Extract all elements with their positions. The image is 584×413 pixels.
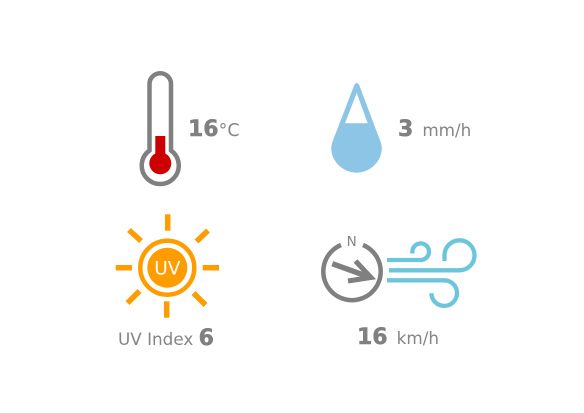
- panel: temperature: [142, 73, 240, 184]
- UV index value: UV Index 6: [118, 326, 214, 351]
- compass north label: N: [347, 234, 357, 250]
- icon: thermometer: [142, 73, 179, 184]
- UV label: UV: [154, 258, 181, 280]
- icon: wind: [387, 240, 474, 306]
- panel: rainfall: [331, 83, 471, 173]
- icon: water drop: [331, 83, 382, 173]
- icon: compass: [323, 234, 381, 300]
- wind value: 16 km/h: [357, 325, 439, 350]
- panel: wind: [323, 234, 474, 350]
- compass arrow: [332, 261, 371, 281]
- rainfall value: 3 mm/h: [398, 117, 471, 142]
- temperature value: 16°C: [188, 117, 240, 142]
- panel: UV index: [116, 214, 219, 351]
